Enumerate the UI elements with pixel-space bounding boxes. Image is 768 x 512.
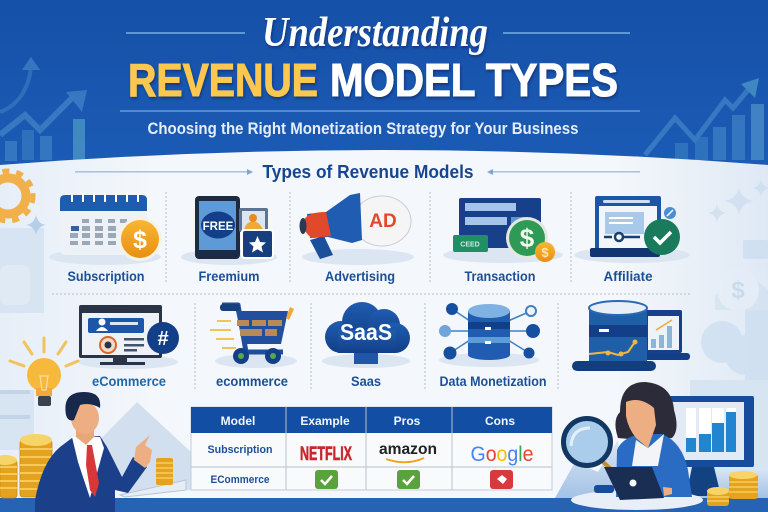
label: Transaction (464, 268, 536, 284)
magnifier (564, 418, 612, 470)
right background decoration (701, 178, 768, 390)
icon: SaaS cloud: SaaS (340, 319, 392, 345)
icon: photo card (239, 208, 268, 232)
row: subscription: amazon (379, 441, 437, 458)
desk plate (571, 490, 703, 510)
icon: red cross (490, 470, 513, 489)
coin stacks right (707, 471, 758, 506)
item: affiliate (574, 196, 690, 284)
title: main line: REVENUE (128, 54, 318, 106)
label: ecommerce (216, 373, 288, 389)
header decoration: right growth chart (645, 78, 764, 160)
label: eCommerce (92, 373, 166, 389)
table header: Cons (485, 414, 515, 428)
laptop (594, 467, 672, 500)
row: ecommerce (210, 470, 513, 489)
item: ecommerce cart (210, 304, 297, 389)
icon: sparkle (26, 215, 46, 235)
icon: laptop with link (590, 196, 661, 257)
icon: megaphone (300, 193, 362, 259)
title: script line: Understanding (262, 10, 488, 56)
item: ecommerce monitor (78, 305, 179, 389)
section heading: Types of Revenue Models (262, 162, 474, 182)
monitor with bar chart (661, 396, 754, 496)
icon: tablet: FREE (203, 221, 234, 233)
row: subscription: Google (470, 443, 534, 466)
background pyramid and paper behind presenter (0, 390, 191, 497)
icon: database network (439, 303, 540, 360)
icon: database with laptop chart (572, 301, 690, 371)
hair (615, 382, 677, 440)
icon: calendar (60, 193, 147, 255)
title: main line: MODEL TYPES (330, 54, 618, 106)
icon: monitor (79, 305, 162, 365)
dotted dividers (52, 192, 691, 390)
face (626, 400, 656, 448)
title: main line (128, 54, 618, 106)
icon: small orange coin: $ (541, 245, 549, 260)
item: freemium (181, 196, 277, 284)
header decoration: left growth chart (0, 57, 87, 161)
row: subscription (208, 441, 534, 466)
icon: green check (315, 470, 338, 489)
icon: AD speech bubble: AD (369, 211, 397, 232)
label: Affiliate (604, 268, 653, 284)
label: Advertising (325, 268, 395, 284)
icon: light bulb (10, 338, 78, 406)
item: data monetization (439, 303, 546, 389)
icon: green cash tag: CEED (460, 242, 480, 248)
icon: green dollar coin: $ (520, 223, 535, 253)
subtitle: Choosing the Right Monetization Strategy for Your Business (148, 119, 578, 138)
label: Subscription (68, 268, 144, 284)
background shapes behind analyst (555, 380, 768, 498)
row: ecommerce: ECommerce (210, 474, 270, 486)
icon: dollar coin: $ (133, 226, 147, 254)
row: subscription: Subscription (208, 444, 273, 456)
label: Data Monetization (440, 373, 546, 389)
table header (191, 407, 552, 433)
right background decoration: $ (731, 277, 745, 304)
table header: Model (221, 414, 255, 428)
title rules (120, 32, 640, 112)
item: subscription (49, 193, 162, 284)
icon: green check (397, 470, 420, 489)
footer band (0, 498, 768, 512)
left background decoration (0, 171, 46, 450)
section heading (75, 162, 640, 182)
coin stacks left (0, 434, 52, 498)
row: subscription: NETFLIX (300, 444, 352, 465)
label: Freemium (198, 268, 260, 284)
header background (0, 0, 768, 175)
icon: hash badge: # (157, 328, 169, 350)
item: saas cloud (322, 302, 410, 389)
table (191, 407, 552, 490)
main panel background (0, 150, 768, 512)
label: Saas (351, 373, 381, 389)
table header: Example (300, 414, 350, 428)
icon: small coin stack (156, 458, 173, 485)
icon: pencil badge (664, 207, 676, 219)
torso (616, 434, 692, 497)
illustration: woman with laptop (564, 382, 754, 510)
illustration: businessman (35, 392, 152, 512)
icon: shopping cart (210, 304, 294, 364)
item: advertising (300, 193, 414, 284)
item: transaction (443, 198, 563, 284)
icon: star tile (241, 229, 274, 259)
icon: orange gear (0, 171, 33, 221)
icon: check badge (644, 219, 680, 255)
icon: payment card (459, 198, 541, 248)
table header: Pros (394, 414, 421, 428)
